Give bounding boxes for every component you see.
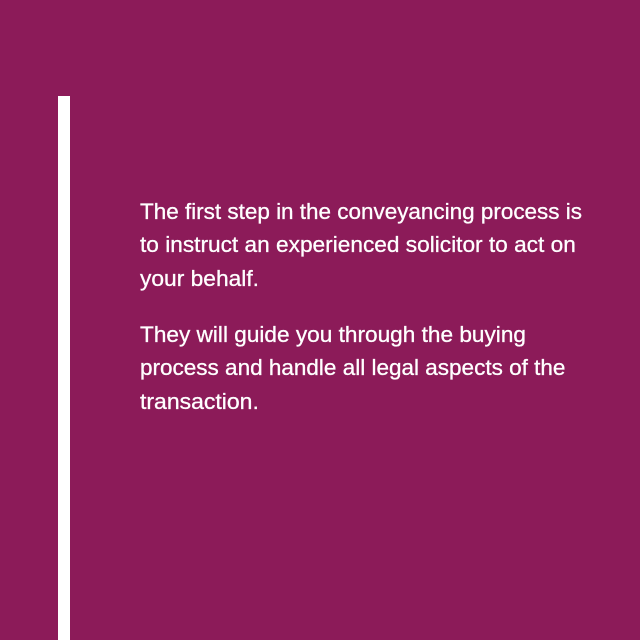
text block: second paragraph: transaction. <box>140 388 259 414</box>
text block: first paragraph: The first step in the conveyancing process is <box>140 198 582 224</box>
text block: second paragraph: process and handle all legal aspects of the <box>140 355 565 380</box>
text block: first paragraph: your behalf. <box>140 266 259 290</box>
vertical white bar <box>58 96 70 640</box>
text block: first paragraph: to instruct an experienced solicitor to act on <box>140 232 576 257</box>
text block: second paragraph: They will guide you through the buying <box>140 322 526 346</box>
text block: second paragraph <box>140 322 565 414</box>
text block: first paragraph <box>140 198 582 291</box>
